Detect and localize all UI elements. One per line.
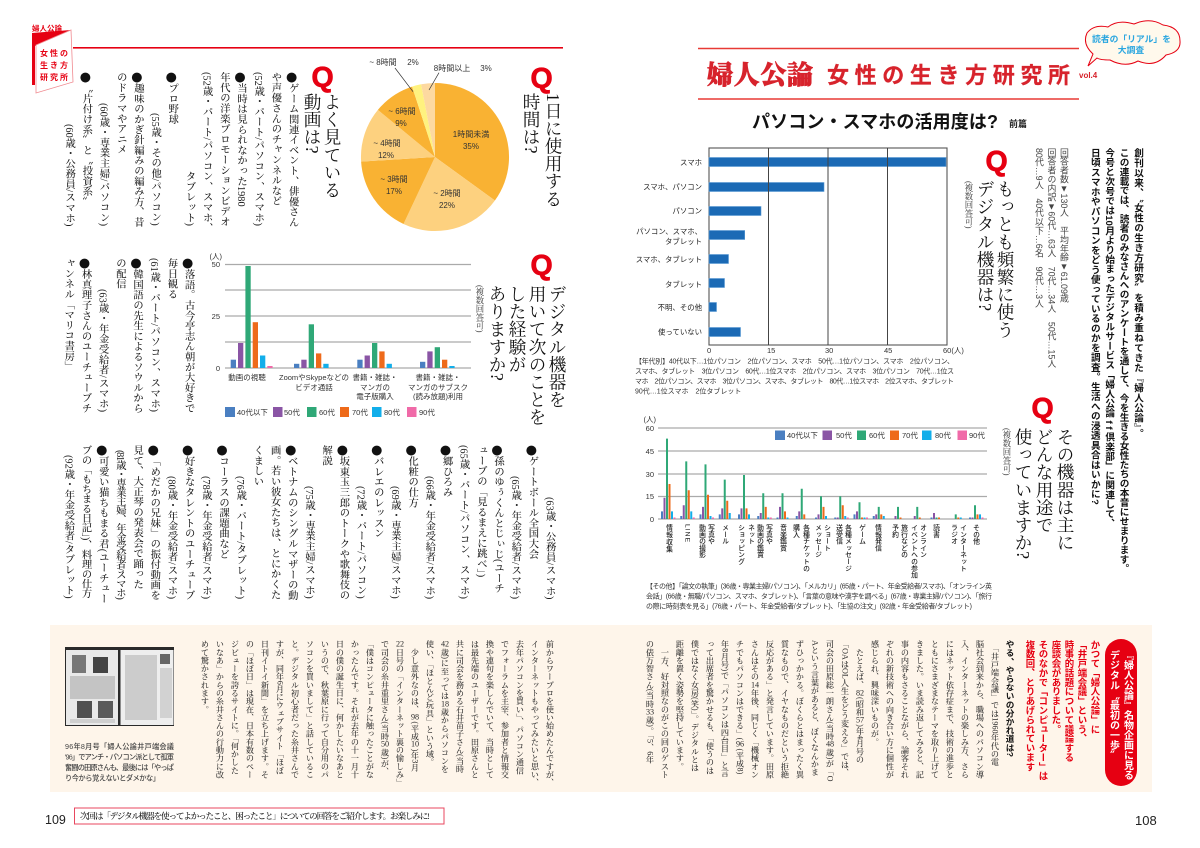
subtitle: パソコン・スマホの活用度は?: 前篇 <box>1009 118 1027 129</box>
bar chart: device uses: 各種チケットの <box>802 523 810 572</box>
comments: video answers bottom: ● 好きなタレントのユーチューブ <box>180 445 196 600</box>
comments: video answers middle: 毎日観る <box>165 258 176 299</box>
comments: video answers bottom: (92歳・年金受給者/タブレット) <box>62 455 73 599</box>
comments: video answers bottom: ● 孫のゆぅくんとじぃじ(ユーチ <box>489 445 505 593</box>
article text right: きました。いま読み返してみると、記 <box>916 640 924 778</box>
article text right: さんはその 14 年後、同じく「機械オン <box>750 640 760 778</box>
comments: video answers middle: ● 林真理子さんのユーチューブチ <box>76 258 92 413</box>
comments: video answers bottom: ● コーラスの課題曲など <box>214 445 230 559</box>
caption: by age: マホ 2位パソコン、スマホ 3位パソコン、スマホ、タブレット 80代…1位スマホ 2位スマホ、タブレット <box>635 376 954 386</box>
red lead text: そのなかで「コンピューター」は <box>1038 640 1048 781</box>
bar chart: device uses: 送受信 <box>834 523 843 546</box>
article text left: めて驚かされます。 <box>200 640 210 713</box>
article text left: と。デジタル初心者だった糸井さんで <box>290 640 300 778</box>
heading: 1日に使用する時間は? <box>521 93 563 207</box>
article text right: 質なもので、イヤなものだという拒絶 <box>780 640 790 778</box>
bar chart: digital device experience: 40代以下 <box>237 407 268 417</box>
article text left: 共に司会を務める石井苗子さん(当時 <box>456 640 464 773</box>
article text right <box>646 640 1000 782</box>
pie chart: usage hours: ~ 2時間 <box>433 189 461 198</box>
heading: その機器は主にどんな用途で使っていますか?: 使っていますか? <box>1013 428 1033 559</box>
bar chart: device uses: (人) <box>644 415 656 424</box>
caption: other uses: 【その他】「論文の執筆」(36歳・専業主婦/パソコン)、「メルカリ」(65歳・パート、年金受給者/スマホ)、「オンライン英 <box>646 582 992 590</box>
comments: video answers bottom: (81歳・専業主婦、年金受給者/スマホ) <box>114 450 125 599</box>
comments: video answers top: ● ゲーム関連イベント、俳優さん <box>284 72 300 227</box>
caption: by age <box>635 356 954 396</box>
article text right: 年8月号)で「パソコンは四台目」と言 <box>720 640 730 777</box>
article text left: かったんです。それが去年の十一月十 <box>350 640 360 778</box>
bar chart: device uses <box>644 415 987 580</box>
corner tag: 婦人公論 女性の生き方研究所: 女性の <box>40 48 68 58</box>
red lead text: かつて「婦人公論」に <box>1090 640 1100 734</box>
comments: video answers bottom: 画。若い彼女たちは、とにかくた <box>269 445 280 600</box>
comments: video answers bottom: ブの「もちまる日記」)、料理の仕方 <box>80 445 91 598</box>
comments: video answers top: ● 〝片付け系〟と〝投資系〟 <box>77 72 93 207</box>
note: multiple answers: (複数回答可) <box>964 181 973 229</box>
bar chart: most used devices: 0 <box>707 346 711 355</box>
comments: video answers bottom: ● 坂東玉三郎のトークや歌舞伎の <box>334 445 350 600</box>
heading: デジタル機器を用いて次のことをした経験がありますか?: デジタル機器を <box>547 285 567 408</box>
article text right: 距離を置く姿勢を堅持しています。 <box>676 640 684 770</box>
heading: もっとも頻繁に使うデジタル機器は? <box>975 180 1015 338</box>
header rule left <box>73 47 563 49</box>
comments: video answers top: のドラマやアニメ <box>115 72 126 154</box>
article text left: いなあ」からの糸井さんの行動力に改 <box>216 640 224 778</box>
red lead text: 「井戸端会議」という、 <box>1076 640 1088 743</box>
photo caption: り今から覚えないとダメかな」 <box>65 774 160 782</box>
pie chart: usage hours: 17% <box>386 187 402 196</box>
article text right: 脳社会到来から、職場へのパソコン導 <box>976 640 984 778</box>
bar chart: device uses: ゲーム <box>858 523 866 545</box>
caption: other uses: 会話」(66歳・無職/パソコン、スマホ、タブレット)、「言葉の意味や漢字を調べる」(67歳・専業主婦/パソコン)、「旅行 <box>646 592 992 600</box>
comments: video answers bottom: (65歳・年金受給者/スマホ) <box>509 476 520 599</box>
article text left: 使い、「ほとんど玩具」という域。 <box>426 640 434 766</box>
bar chart: device uses: 50代 <box>836 430 852 440</box>
title: 婦人公論 女性の生き方研究所: 女性の生き方研究所 <box>827 63 1070 88</box>
pie chart: usage hours: ~ 4時間 <box>373 139 401 148</box>
bar chart: device uses: 予約 <box>890 524 899 539</box>
article text left: でフォーラムを主宰、参加者と情報交 <box>500 640 510 778</box>
bar chart: device uses: 40代以下 <box>787 430 818 440</box>
bar chart: device uses: メッセージ <box>814 524 822 558</box>
bar chart: device uses: ショッピング <box>736 524 745 566</box>
article text left: 前からワープロを使い始めたんですが、 <box>546 640 554 787</box>
article text left: 「僕はコンピュータに触ったことがな <box>366 640 374 778</box>
comments: video answers bottom: (65歳・パート/パソコン、スマホ) <box>458 445 469 599</box>
bar chart: digital device experience: 書籍・雑誌・ <box>352 372 398 382</box>
photo: magazine spread <box>65 647 174 726</box>
heading: よく見ている動画は?: よく見ている <box>322 93 342 199</box>
bar chart: most used devices: 15 <box>767 346 775 355</box>
article text left: 換や連句を楽しんでいて、当時として <box>486 640 494 778</box>
pie chart: usage hours: 1時間未満 <box>453 129 489 139</box>
bar chart: device uses: 30 <box>646 470 654 479</box>
article text left: 42 歳)に至っては 18 歳からパソコンを <box>440 640 450 773</box>
bar chart: device uses: 音楽鑑賞 <box>778 523 787 552</box>
heading: もっとも頻繁に使うデジタル機器は?: もっとも頻繁に使う <box>995 180 1015 338</box>
heading: デジタル機器を用いて次のことをした経験がありますか?: した経験が <box>507 285 527 373</box>
comments: video answers bottom: ● ゲートボール全国大会 <box>523 445 539 559</box>
comments: video answers bottom: (80歳・年金受給者/スマホ) <box>165 476 176 599</box>
title: 婦人公論 女性の生き方研究所: 婦人公論 <box>707 61 813 90</box>
bar chart: digital device experience: 60代 <box>319 407 335 417</box>
bar chart: device uses: イベントへの参加 <box>910 524 918 580</box>
article heading: やる、やらないの分かれ道は? <box>1005 640 1015 757</box>
red pill: 名物企画 <box>1105 639 1137 786</box>
caption: other uses <box>646 582 992 610</box>
bar chart: most used devices: 不明、その他 <box>658 303 703 312</box>
article text right: ずひっかかる。ぼくらとはまったく異 <box>796 640 804 778</box>
heading: よく見ている動画は?: 動画は? <box>302 93 322 154</box>
article text left: 日刊イトイ新聞」を立ち上げます。そ <box>260 640 270 778</box>
comments: video answers top: や声優さんのチャンネルなど <box>269 72 280 206</box>
photo caption: 96年8月号「婦人公論井戸端会議 <box>65 742 174 751</box>
respondent data: 80代…9人 40代以下…6名 90代…3人 <box>1034 148 1044 308</box>
article text right: にはネット依存症まで、技術の進歩と <box>946 640 954 778</box>
pie chart: usage hours: 2% <box>407 58 419 67</box>
bar chart: device uses: 購入 <box>792 523 800 539</box>
speech bubble: 読者の「リアル」を大調査 <box>1085 21 1180 66</box>
bar chart: device uses: 45 <box>646 447 654 456</box>
comments: video answers bottom: (72歳・パート/パソコン) <box>355 486 366 599</box>
comments: video answers bottom: ューブの「見るまえに跳べ」) <box>475 445 486 577</box>
photo caption: '96」でアンチ・パソコン派として孤軍 <box>65 752 174 762</box>
bar chart: device uses: 15 <box>646 492 654 501</box>
bar chart: device uses: 0 <box>650 515 654 524</box>
heading: その機器は主にどんな用途で使っていますか?: どんな用途で <box>1034 428 1054 534</box>
bar chart: digital device experience: マンガのサブスク <box>408 382 468 392</box>
article text right: ぞれの新技術への向き合い方に個性が <box>886 640 894 778</box>
caption: by age: 90代…1位スマホ 2位タブレット <box>635 386 741 396</box>
heading: もっとも頻繁に使うデジタル機器は?: デジタル機器は? <box>975 180 995 311</box>
pie chart: usage hours: 35% <box>463 142 479 151</box>
article text left: 少し意外なのは、 98 (平成 10 )年3月 <box>410 648 420 772</box>
pie chart: usage hours: ~ 3時間 <box>380 175 408 184</box>
comments: video answers bottom: (76歳・パート/タブレット) <box>234 476 245 599</box>
bar chart: digital device experience: 0 <box>216 364 220 373</box>
article text left: いうので、秋葉原に行って自分用のパ <box>320 640 330 778</box>
red lead text: 複数回、とりあげられています <box>1024 640 1036 771</box>
article text right: 司会の田原総一朗さん(当時 48 歳)が「O <box>826 640 834 782</box>
bar chart: device uses: 動画の鑑賞 <box>756 523 764 559</box>
comments: video answers bottom: ● ベトナムのシングルマザーの動 <box>283 445 299 600</box>
comments: video answers top: タブレット) <box>183 171 194 226</box>
comments: video answers bottom: ● 可愛い猫ちもまる君(ユーチュー <box>94 445 110 604</box>
bar chart: device uses: 80代 <box>935 430 951 440</box>
pie chart: usage hours <box>361 58 509 231</box>
bar chart: device uses: 写真や <box>764 524 773 545</box>
comments: video answers bottom: ● バレエのレッスン <box>369 445 385 538</box>
corner tag: 婦人公論 女性の生き方研究所: 生き方 <box>40 60 68 70</box>
photo caption <box>65 742 175 782</box>
pie chart: usage hours: ~ 8時間 <box>369 58 397 67</box>
bar chart: most used devices: 45 <box>884 346 892 355</box>
bar chart: digital device experience: ビデオ通話 <box>295 382 333 392</box>
comments: video answers bottom: ● 化粧の仕方 <box>403 445 419 508</box>
vol label: vol.4 <box>1079 71 1098 80</box>
bar chart: digital device experience <box>210 252 471 417</box>
bar chart: device uses: 写真や <box>706 524 715 545</box>
bar chart: most used devices: タブレット <box>665 237 702 246</box>
Q mark: experience: Q <box>530 250 553 282</box>
comments: video answers bottom: ● 郷ひろみ <box>437 445 453 497</box>
bar chart: device uses: インターネット <box>958 524 967 572</box>
intro text <box>1089 148 1144 573</box>
article text right: 「OAはOL人生をどう変える」では、 <box>840 640 850 777</box>
bar chart: most used devices: パソコン <box>672 206 702 216</box>
comments: video answers middle: ● 韓国語の先生によるソウルから <box>128 258 144 413</box>
comments: video answers top: (52歳・パート/パソコン、スマホ、 <box>201 72 212 233</box>
comments: video answers middle: (61歳・パート/パソコン、スマホ) <box>148 258 159 412</box>
panel: cream article background <box>50 625 1152 792</box>
article text left: すが、同年6月にウェブサイト「ほぼ <box>276 640 284 774</box>
bar chart: device uses: 読書 <box>932 523 940 539</box>
article text left: ソコンを買いまして」と話しているこ <box>306 640 314 778</box>
heading: 1日に使用する時間は?: 1日に使用する <box>543 93 563 207</box>
Q mark: frequent device: Q <box>986 146 1008 178</box>
notice box: next issue: 次回は「デジタル機器を使ってよかったこと、困ったこと」についての回答をご紹介します。お楽しみに! <box>80 810 430 821</box>
comments: video answers top: (60歳・専業主婦/パソコン) <box>98 103 109 226</box>
bar chart: device uses: オンライン <box>918 524 927 558</box>
comments: video answers top: ● プロ野球 <box>163 72 179 124</box>
bar chart: most used devices: パソコン、スマホ、 <box>636 227 702 236</box>
comments: video answers middle: ● 落語。古今亭志ん朝が大好きで <box>180 258 196 413</box>
right header rules <box>698 48 1079 99</box>
bar chart: device uses: 90代 <box>969 430 985 440</box>
bar chart: device uses: 70代 <box>902 430 918 440</box>
bar chart: digital device experience: 動画の視聴 <box>228 372 266 382</box>
comments: video answers middle <box>62 258 196 413</box>
comments: video answers bottom: くましい <box>251 445 262 486</box>
bar chart: most used devices: スマホ、パソコン <box>643 182 702 192</box>
heading: デジタル機器を用いて次のことをした経験がありますか? <box>487 285 567 426</box>
comments: video answers bottom: (69歳・専業主婦/スマホ) <box>389 486 400 599</box>
heading: その機器は主にどんな用途で使っていますか? <box>1013 428 1075 559</box>
comments: video answers middle: ャンネル「マリコ書房」 <box>62 258 73 371</box>
article text right: 「井戸端会議」では1960年代の電 <box>990 648 1000 766</box>
bar chart: digital device experience: ZoomやSkypeなどの <box>279 373 349 382</box>
Q mark: hours: Q <box>530 63 553 95</box>
article text left: 去年パソコンを買い」、パソコン通信 <box>516 640 524 774</box>
red lead text <box>1024 640 1100 781</box>
subtitle: パソコン・スマホの活用度は?: パソコン・スマホの活用度は? <box>752 112 998 132</box>
bar chart: digital device experience: 70代 <box>352 407 368 417</box>
heading: 1日に使用する時間は?: 時間は? <box>521 93 541 154</box>
bar chart: most used devices: 使っていない <box>658 328 702 336</box>
comments: video answers bottom: ● 「めだかの兄妹」の振付動画を <box>145 445 161 600</box>
article text right: 事の内容もさることながら、論客それ <box>900 640 910 778</box>
bar chart: digital device experience: マンガの <box>360 382 390 392</box>
comments: video answers top: (52歳・パート/パソコン、スマホ) <box>252 72 263 226</box>
article text right: 反応がある」と発言しています。田原 <box>766 640 774 778</box>
comments: video answers top: (60歳・公務員/スマホ) <box>63 124 74 226</box>
intro text: 創刊以来、〝女性の生き方研究〟を積み重ねてきた『婦人公論』。 <box>1132 148 1143 438</box>
intro text: 日頃スマホやパソコンをどう使っているのかを調査。生活への浸透具合はいかに? <box>1089 148 1100 505</box>
photo caption: 奮闘の田原さんも、最後には「やっぱ <box>65 763 175 772</box>
bar chart: digital device experience: 50 <box>212 260 220 269</box>
article text left: は最先端のユーザーです。田原さんと <box>470 640 480 778</box>
bar chart: device uses: 旅行などの <box>900 523 908 558</box>
comments: video answers bottom: 見て、大正琴の発表会で踊った <box>131 445 142 589</box>
Q mark: uses: Q <box>1032 393 1054 425</box>
page number 109: 109 <box>45 813 66 827</box>
bar chart: most used devices: スマホ <box>680 158 702 167</box>
bar chart: most used devices: タブレット <box>665 280 702 289</box>
article text left: で司会の糸井重里さん(当時 50 歳)が、 <box>380 640 390 776</box>
heading: デジタル機器を用いて次のことをした経験がありますか?: 用いて次のことを <box>527 285 547 426</box>
bar chart: device uses: 60 <box>646 424 654 433</box>
bar chart: digital device experience: 80代 <box>384 407 400 417</box>
comments: video answers top: (55歳・その他/パソコン) <box>149 113 160 226</box>
bar chart: digital device experience: 電子版購入 <box>356 391 394 401</box>
bar chart: device uses: 動画の撮影 <box>698 523 706 559</box>
bar chart: device uses: 各種メッセージ <box>844 523 852 572</box>
bar chart: device uses: ショート <box>822 524 831 551</box>
Q mark: usage video: Q <box>312 62 334 94</box>
comments: video answers top <box>63 72 300 233</box>
bar chart: device uses: メール <box>720 524 729 545</box>
speech bubble: 読者の「リアル」を大調査: 大調査 <box>1118 44 1144 55</box>
pie chart: usage hours: 8時間以上 <box>434 64 470 73</box>
article text left: ジビューを誇るサイトに。「何かした <box>230 640 240 774</box>
note: multiple answers: (複数回答可) <box>475 285 484 333</box>
intro text: 今号と次号では10月より始まったデジタルサービス「婦人公論 f f 倶楽部」に関連して、 <box>1103 148 1114 528</box>
comments: video answers bottom: (63歳・公務員/スマホ) <box>544 497 555 599</box>
article text right: 一方、好対照なのがこの回のゲスト <box>660 648 670 778</box>
comments: video answers bottom: (66歳・年金受給者/スマホ) <box>423 476 434 599</box>
pie chart: usage hours: 12% <box>378 151 394 160</box>
bar chart: device uses: 60代 <box>869 430 885 440</box>
bar chart: device uses: その他 <box>972 524 980 546</box>
comments: video answers bottom: (78歳・年金受給者/スマホ) <box>200 476 211 599</box>
respondent data: 回答者の内訳▼60代…63人 70代…34人 50代…15人 <box>1046 148 1056 368</box>
comments: video answers top: ● 趣味のかぎ針編みの編み方、昔 <box>129 72 145 227</box>
page number 108: 108 <box>1135 813 1157 828</box>
bar chart: most used devices: 60(人) <box>943 346 964 355</box>
bar chart: digital device experience: (人) <box>210 252 222 261</box>
speech bubble: 読者の「リアル」を大調査: 読者の「リアル」を <box>1092 33 1171 44</box>
red pill: 名物企画: 『婦人公論』名物企画に見る <box>1122 650 1134 780</box>
respondent data: 回答者数▼130人 平均年齢▼61.09歳 <box>1059 148 1069 303</box>
article text right: 感じられ、興味深いものが。 <box>870 640 880 746</box>
article text right: ともにさまざまなテーマを取り上げて <box>930 640 940 778</box>
title: 婦人公論 女性の生き方研究所 <box>707 61 1070 90</box>
corner tag: 婦人公論 女性の生き方研究所: 研究所 <box>40 72 68 82</box>
red pill: 名物企画: デジタル〝最初の一歩〟 <box>1108 649 1120 760</box>
comments: video answers middle: (63歳・年金受給者/スマホ) <box>97 289 108 412</box>
article text left: 22 日号の「インターネット裏の愉しみ」 <box>396 640 404 787</box>
note: multiple answers: (複数回答可) <box>1002 428 1011 476</box>
pie chart: usage hours: 9% <box>395 119 407 128</box>
comments: video answers bottom <box>62 445 556 604</box>
heading: その機器は主にどんな用途で使っていますか?: その機器は主に <box>1055 428 1075 551</box>
article text left: インターネットもやってみたいと思い、 <box>530 640 540 787</box>
heading: デジタル機器を用いて次のことをした経験がありますか?: ありますか? <box>487 285 507 381</box>
pie chart: usage hours: 3% <box>480 64 492 73</box>
bar chart: most used devices: スマホ、タブレット <box>636 255 702 264</box>
article text left: の「ほぼ日」は現在、日本有数のペー <box>246 640 254 778</box>
article text left <box>200 640 554 787</box>
article text right: チでもパソコンはできる」( 96 (平成8) <box>736 640 744 774</box>
bar chart: most used devices <box>636 148 964 355</box>
caption: by age: 【年代別】40代以下…1位パソコン 2位パソコン、スマホ 50代…1位パソコン、スマホ 2位パソコン、 <box>635 356 954 366</box>
article text right: 入、インターネットの楽しみ方、さら <box>960 640 970 778</box>
notice box: next issue <box>74 808 444 824</box>
red lead text: 時事的話題について議論する <box>1064 640 1074 762</box>
article text right: 僕ではなく女房(笑)」。デジタルとは <box>690 640 700 772</box>
bar chart: device uses: 情報発信 <box>874 523 882 552</box>
comments: video answers middle: の配信 <box>114 258 125 289</box>
pie chart: usage hours: 22% <box>439 201 455 210</box>
bar chart: digital device experience: (読み放題)利用 <box>413 391 463 401</box>
comments: video answers top: 年代の洋楽プロモーションビデオ <box>218 72 229 226</box>
caption: by age: スマホ、タブレット 3位パソコン 60代…1位スマホ 2位パソコン、スマホ 3位パソコン 70代…1位ス <box>635 366 954 376</box>
corner tag: 婦人公論 女性の生き方研究所: 婦人公論 <box>32 23 62 33</box>
comments: video answers top: ● 当時は見られなかった1980 <box>232 72 248 207</box>
bar chart: device uses: ラジオ <box>950 524 958 545</box>
red lead text: 座談会がありました。 <box>1050 640 1062 734</box>
heading: よく見ている動画は? <box>302 93 342 199</box>
article text right: って出席者を驚かせるも、「使うのは <box>706 640 714 774</box>
article text left: 日の僕の誕生日に、何かしたいなあと <box>336 640 344 778</box>
comments: video answers bottom: 解説 <box>320 445 331 466</box>
respondent data <box>1034 148 1069 368</box>
article text right: Aという言葉があると、ぼくなんかま <box>810 640 820 776</box>
caption: other uses: の際に時刻表を見る」(76歳・パート、年金受給者/タブレット)、「生協の注文」(92歳・年金受給者/タブレット) <box>646 602 972 610</box>
bar chart: digital device experience: 書籍・雑誌・ <box>416 372 460 382</box>
intro text: この連載では、読者のみなさんへのアンケートを通して、今を生きる女性たちの本音にせまります。 <box>1118 148 1129 573</box>
article text right: たとえば、 82 (昭和 57 )年4月号の <box>856 648 864 764</box>
bar chart: most used devices: 30 <box>825 346 833 355</box>
article text right: の俵万智さん(当時 33 歳)。「5、6年 <box>646 640 654 763</box>
bar chart: digital device experience: 50代 <box>284 407 300 417</box>
bar chart: digital device experience: 90代 <box>419 407 435 417</box>
bar chart: device uses: ネット <box>746 524 755 545</box>
bar chart: digital device experience: 25 <box>212 312 220 321</box>
corner tag: 婦人公論 女性の生き方研究所 <box>32 23 73 93</box>
pie chart: usage hours: ~ 6時間 <box>388 107 416 116</box>
comments: video answers bottom: (75歳・専業主婦/スマホ) <box>303 486 314 599</box>
bar chart: device uses: 情報収集 <box>664 523 673 554</box>
bar chart: device uses: LINE <box>684 524 690 543</box>
